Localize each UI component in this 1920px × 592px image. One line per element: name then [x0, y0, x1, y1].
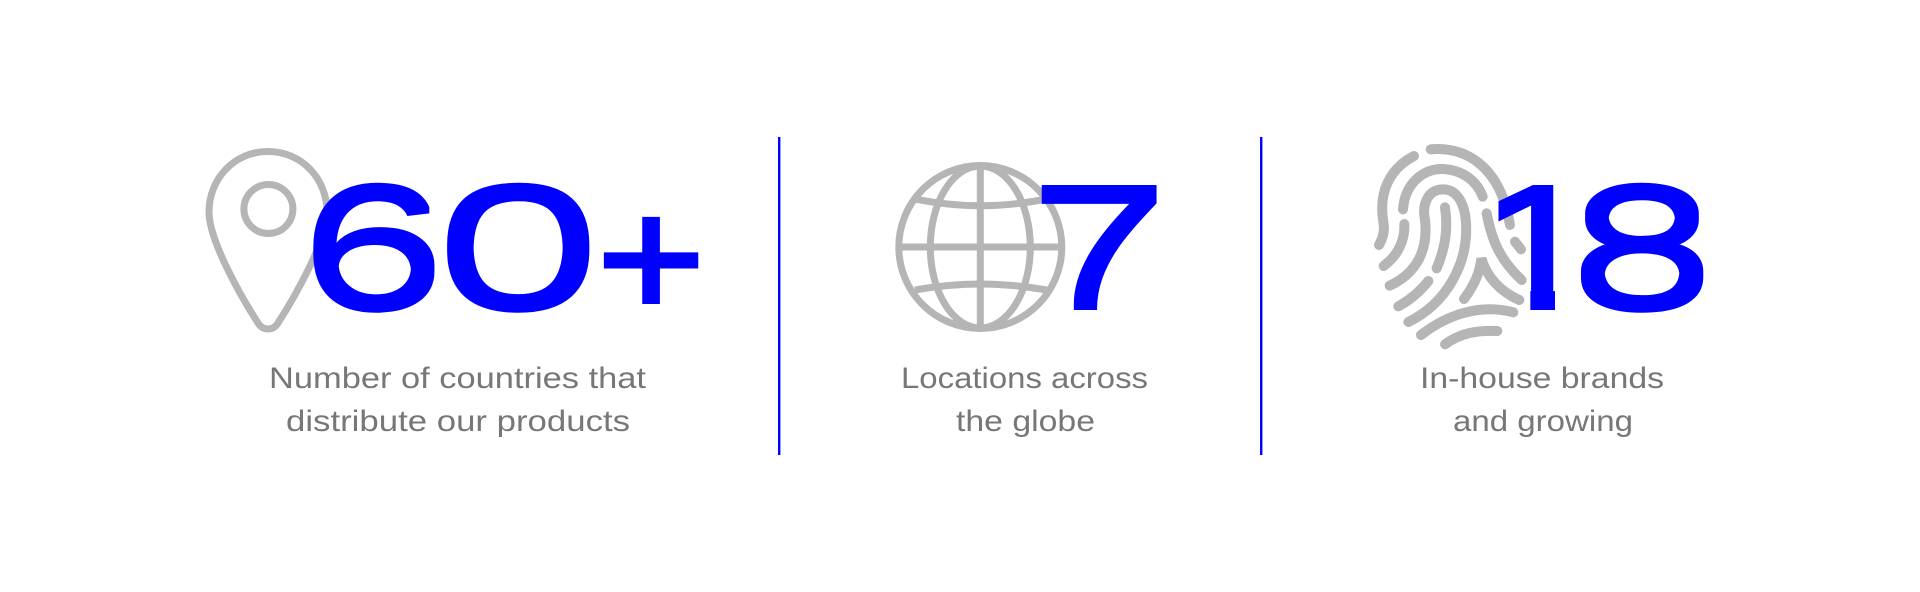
stat number: 60+: + [597, 163, 705, 353]
stat number: 18: 1 [1468, 150, 1608, 344]
caption: countries: distribute our products [286, 405, 630, 438]
divider right [1260, 137, 1262, 455]
caption: brands: and growing [1453, 405, 1633, 438]
caption: brands: In-house brands [1420, 362, 1664, 395]
caption: brands [1420, 362, 1664, 438]
caption: countries: Number of countries that [269, 362, 647, 395]
stat number: 60+: 0 [436, 150, 601, 345]
panel: locations [899, 150, 1169, 438]
stat number: 60+ [300, 150, 705, 353]
stat number: 7: 7 [1029, 150, 1169, 344]
panel: countries [209, 150, 705, 438]
stat number: 18: 8 [1570, 150, 1715, 346]
caption: locations: the globe [956, 405, 1095, 438]
icon: globe [899, 166, 1062, 328]
caption: locations [901, 362, 1148, 438]
caption: countries [269, 362, 647, 438]
stat number: 18 [1498, 182, 1704, 313]
icon: map pin [209, 152, 327, 329]
icon: fingerprint [1379, 149, 1522, 344]
panel: brands [1379, 149, 1715, 438]
stat number: 60+: 6 [300, 150, 446, 346]
caption: locations: Locations across [901, 362, 1148, 395]
divider left [778, 137, 780, 455]
